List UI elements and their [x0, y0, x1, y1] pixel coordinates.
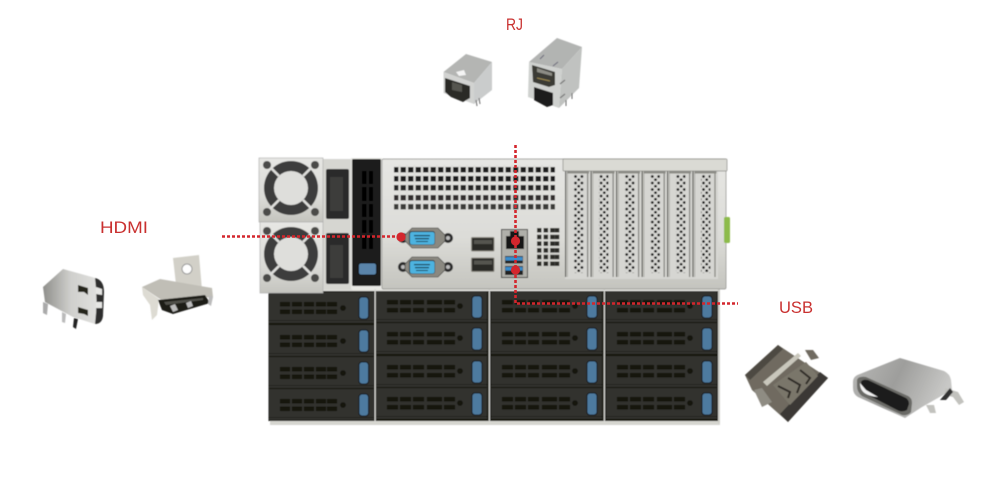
- small vent grid: [537, 228, 559, 266]
- callout line: HDMI: [222, 235, 400, 238]
- icon: stacked RJ connector: [528, 38, 582, 108]
- drive column 2: [376, 291, 487, 419]
- VGA port lower: [398, 257, 453, 277]
- icon: USB board connector: [745, 345, 828, 422]
- marker: VGA port: [396, 232, 406, 242]
- icon: HDMI vertical connector: [43, 269, 104, 329]
- heading: RJ: RJ: [506, 15, 523, 34]
- icon: USB-C connector: [853, 358, 964, 418]
- PCI slot covers: [565, 171, 718, 279]
- drive column 3: [491, 291, 602, 419]
- server rear view: [259, 158, 730, 425]
- heading: USB: USB: [779, 298, 813, 317]
- callout line: USB: [516, 245, 738, 304]
- drive column 4: [606, 291, 717, 419]
- fan modules: [259, 158, 323, 293]
- USB ports left: [472, 238, 494, 272]
- network and USB port block: [502, 230, 528, 278]
- green latch: [724, 217, 730, 243]
- drive cage body: [268, 289, 720, 425]
- top lid bar: [563, 159, 727, 171]
- main rear panel: [382, 159, 726, 289]
- heading: HDMI: HDMI: [100, 218, 148, 237]
- marker: RJ port: [511, 236, 520, 246]
- marker: USB port: [511, 265, 520, 275]
- icon: HDMI connector with tab: [142, 255, 213, 320]
- black expansion module: [351, 158, 382, 289]
- icon: single RJ connector: [444, 54, 492, 106]
- power supply handles: [322, 159, 352, 290]
- VGA port upper: [398, 228, 453, 248]
- ventilation grid: [394, 165, 555, 211]
- drive column 1: [269, 292, 374, 420]
- callout line: RJ: [514, 145, 517, 241]
